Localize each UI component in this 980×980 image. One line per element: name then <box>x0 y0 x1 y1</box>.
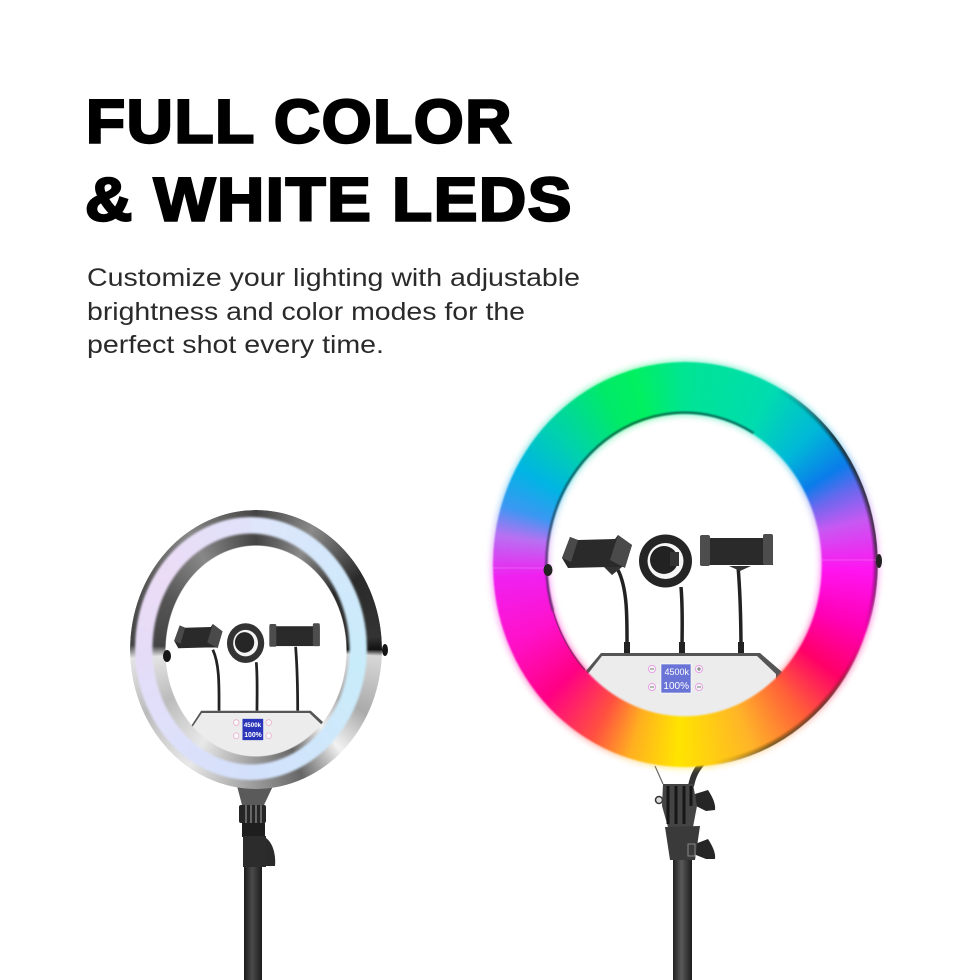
large ring rainbow band <box>492 361 878 768</box>
control panel <box>585 653 782 720</box>
control panel: 4500k <box>664 667 689 677</box>
body text <box>87 264 580 359</box>
small ring light in white mode <box>130 510 388 980</box>
small ring chrome housing <box>130 510 382 789</box>
body text: Customize your lighting with adjustable <box>87 264 580 292</box>
title: FULL COLOR <box>86 88 513 156</box>
RGB ring light in full color mode <box>487 356 883 980</box>
small ring white light band <box>134 516 369 782</box>
title: & WHITE LEDS <box>85 166 573 234</box>
large ring dark outer rim <box>717 390 878 764</box>
control panel: ☼ 100% <box>651 681 689 692</box>
small phone holders and control panel: 100% <box>244 731 262 739</box>
large ring outer glow <box>487 356 883 773</box>
title <box>85 88 573 234</box>
body text: brightness and color modes for the <box>87 298 525 326</box>
body text: perfect shot every time. <box>87 331 384 359</box>
small phone holders and control panel: 4500k <box>244 722 262 729</box>
